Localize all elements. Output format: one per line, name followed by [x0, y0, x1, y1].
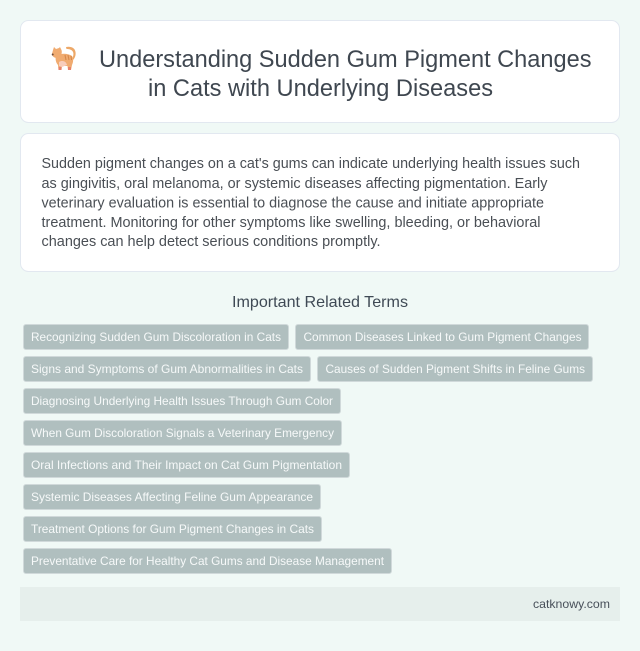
- tag 5: Diagnosing Underlying Health Issues Through Gum Color: [31, 394, 333, 408]
- tag 2: [296, 324, 588, 350]
- tag 2: Common Diseases Linked to Gum Pigment Changes: [304, 330, 582, 344]
- tag 8: [24, 484, 320, 510]
- tag 1: Recognizing Sudden Gum Discoloration in Cats: [31, 330, 281, 344]
- text block: description: Sudden pigment changes on a cat's gums can indicate underlying health issues such: [42, 156, 580, 172]
- footer: site name: catknowy.com: [533, 597, 610, 611]
- panel: description card: [20, 134, 620, 272]
- tag 10: Preventative Care for Healthy Cat Gums and Disease Management: [31, 554, 385, 568]
- panel: title card: [20, 20, 620, 122]
- tag 3: [24, 356, 310, 382]
- title: Understanding Sudden Gum Pigment Changes: [99, 46, 592, 73]
- tag 6: When Gum Discoloration Signals a Veterinary Emergency: [31, 426, 334, 440]
- tag 1: [24, 324, 288, 350]
- tag list: [24, 324, 592, 574]
- tag 7: Oral Infections and Their Impact on Cat Gum Pigmentation: [31, 458, 342, 472]
- tag 6: [24, 420, 342, 446]
- title: in Cats with Underlying Diseases: [148, 75, 493, 102]
- heading: important related terms: Important Related Terms: [232, 294, 408, 311]
- title: [99, 46, 592, 102]
- tag 7: [24, 452, 350, 478]
- text block: description: changes can help detect serious conditions promptly.: [42, 234, 380, 250]
- tag 9: [24, 516, 322, 542]
- text block: description: as gingivitis, oral melanoma, or systemic diseases affecting pigmentation. Early: [42, 176, 548, 192]
- tag 5: [24, 388, 340, 414]
- icon: cat: [52, 47, 76, 70]
- text block: description: [42, 156, 580, 250]
- tag 10: [24, 548, 392, 574]
- tag 4: Causes of Sudden Pigment Shifts in Feline Gums: [326, 362, 585, 376]
- footer bar: [20, 587, 620, 621]
- tag 9: Treatment Options for Gum Pigment Changes in Cats: [31, 522, 314, 536]
- tag 4: [318, 356, 592, 382]
- text block: description: treatment. Monitoring for other symptoms like swelling, bleeding, or behavioral: [42, 215, 540, 231]
- tag 3: Signs and Symptoms of Gum Abnormalities in Cats: [31, 362, 303, 376]
- tag 8: Systemic Diseases Affecting Feline Gum Appearance: [31, 490, 313, 504]
- text block: description: veterinary evaluation is essential to diagnose the cause and initiate appropriate: [42, 196, 544, 212]
